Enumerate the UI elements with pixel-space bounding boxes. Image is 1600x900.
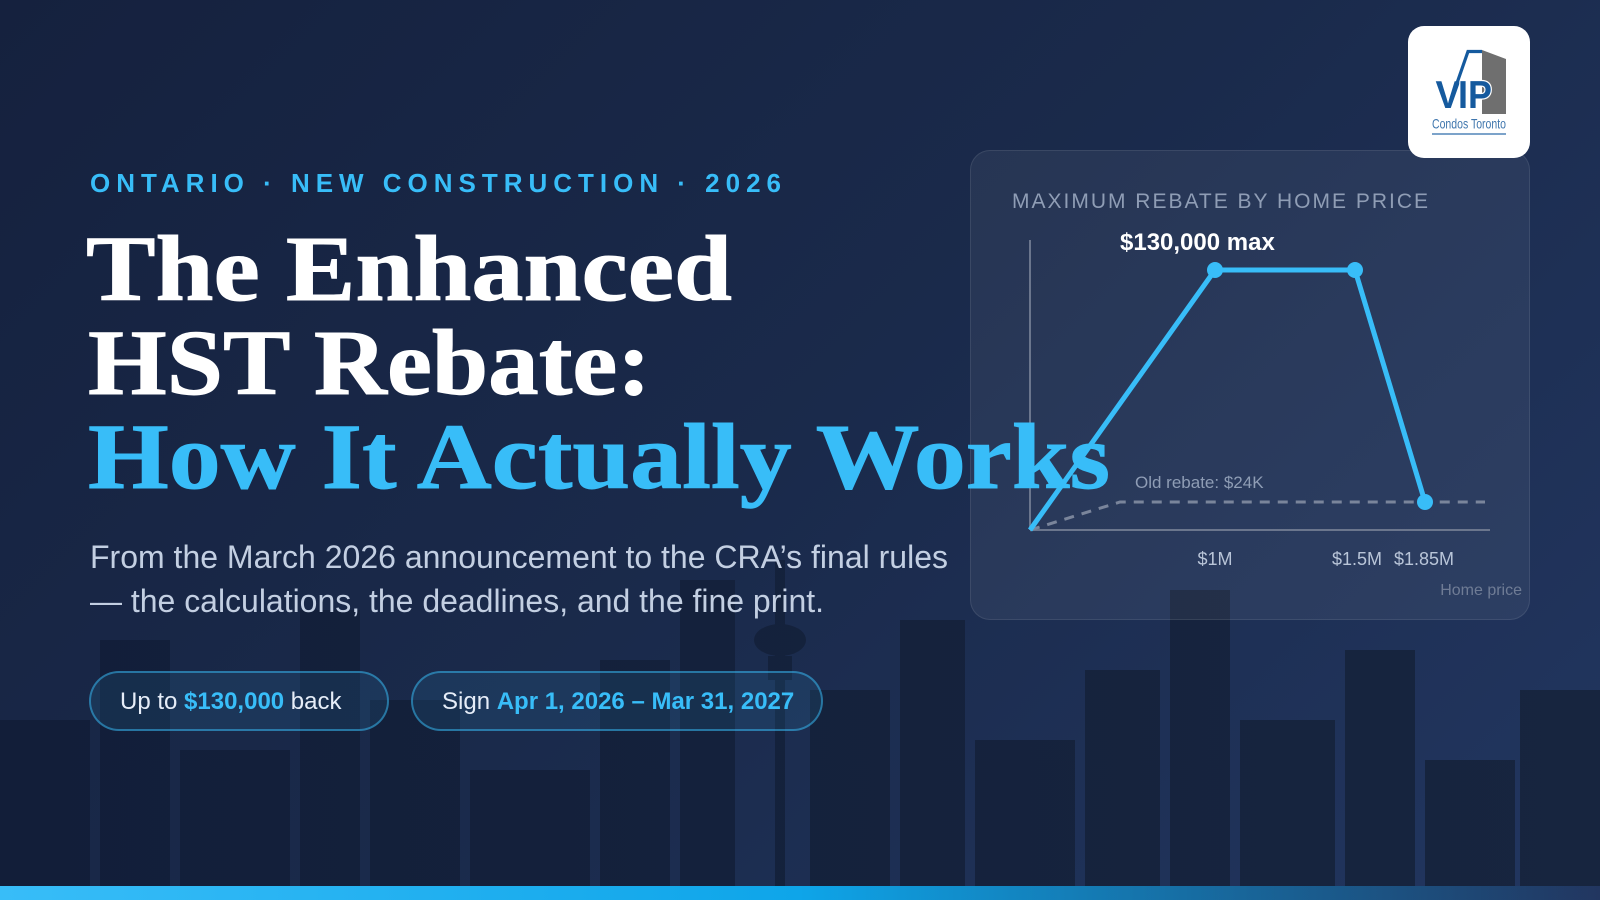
old rebate label: Old rebate: $24K	[1135, 473, 1264, 492]
logo: V	[1436, 74, 1460, 117]
pill: amount	[89, 671, 389, 731]
old rebate dashed line	[1030, 502, 1485, 530]
max label: $130,000 max	[1120, 229, 1275, 256]
chart title: MAXIMUM REBATE BY HOME PRICE	[1012, 190, 1428, 213]
logo: Condos Toronto	[1432, 116, 1506, 132]
rebate curve	[1030, 270, 1425, 530]
pill: dates: Sign Apr 1, 2026 – Mar 31, 2027	[442, 688, 794, 715]
chart: rebate by home price	[1012, 190, 1522, 599]
title: How It Actually Works	[88, 406, 1110, 509]
panel: maximum rebate chart	[970, 150, 1530, 620]
price ticks: $1.5M	[1332, 549, 1382, 569]
pill: dates	[411, 671, 823, 731]
price ticks: $1.85M	[1394, 549, 1454, 569]
subtitle	[90, 539, 948, 619]
title: HST Rebate:	[88, 312, 651, 415]
title	[86, 218, 1110, 509]
curve points	[1207, 262, 1433, 510]
price ticks	[1197, 549, 1454, 569]
logo	[1408, 26, 1530, 158]
pill: amount: Up to $130,000 back	[120, 688, 342, 715]
subtitle: From the March 2026 announcement to the CRA’s final rules	[90, 539, 948, 575]
bottom accent bar	[0, 886, 1600, 900]
axes	[1030, 240, 1490, 530]
logo: IP	[1458, 74, 1492, 117]
eyebrow: ONTARIO · NEW CONSTRUCTION · 2026	[90, 168, 787, 198]
subtitle: — the calculations, the deadlines, and the fine print.	[90, 583, 824, 619]
title: The Enhanced	[86, 218, 732, 321]
axis label: Home price	[1440, 582, 1522, 599]
price ticks: $1M	[1197, 549, 1233, 569]
